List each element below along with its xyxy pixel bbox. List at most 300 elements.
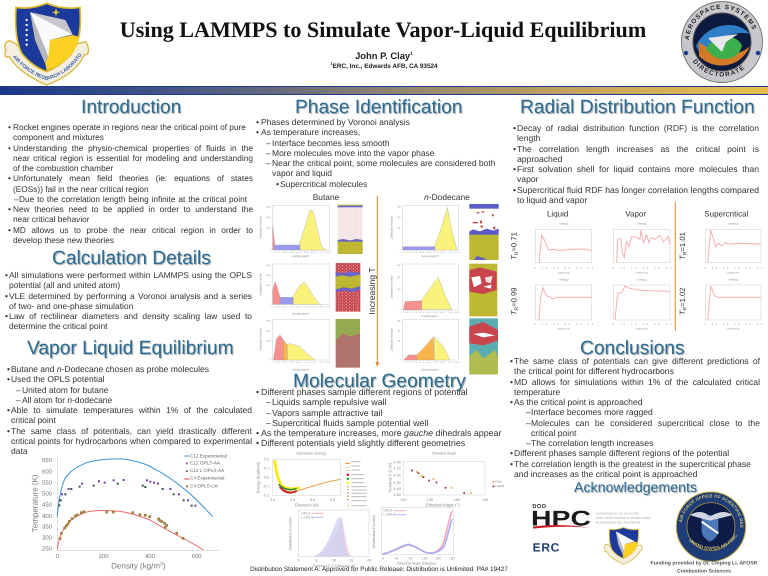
text: conclusions: and increases as the critical point is approached [514,469,697,479]
series: C12 OPLS-AA [59,479,196,507]
text: calculation details: Law of rectilinear diameters and density scaling law used to [9,311,252,321]
heading: Conclusions: Conclusions [580,338,685,359]
logo: ERC: ERC [533,541,560,554]
axis titles: ) [163,561,165,570]
axis labels [259,216,439,371]
text: conclusions: As the critical point is approached [514,397,642,407]
small plot captions: COM(Arg) [559,223,569,225]
text: calculation details: of two- and one-phase simulation [9,301,133,311]
acknowledgement logos [531,492,758,574]
text: calculation details: determine the critical point [9,321,108,331]
axis titles: Density (kg/m [111,561,160,570]
heading: Introduction: Introduction [81,97,181,118]
column label: Butane: Butane [313,192,340,202]
text: introduction: develop these new theories [13,235,114,245]
tick labels [42,457,52,552]
logo: small AFRL shield [605,527,642,564]
reduced temperature labels [510,232,688,315]
phase identification charts: 1000 [266,340,271,342]
chart: dihedral angle: Dihedral Angle (°) [426,502,460,507]
text: conclusions: MD allows for simulations within 1% of the calculated critical [514,376,760,386]
chart: dihedral angle: Liquid [495,484,504,488]
text: introduction: of the combustion chamber [13,163,113,173]
chart: dihedral angle: 130 [427,498,433,502]
text: introduction: – [14,194,19,204]
text: conclusions: The same class of potentials can give different predictions of [514,356,760,366]
tick labels: 0 100 200 300 400 500 600 700 800 [402,361,460,364]
axis labels: Distribution Function [390,216,393,239]
tick labels: 300 [42,534,52,541]
text: vapor liquid equilibrium: – [16,384,21,394]
phase identification charts: 300 [397,340,401,342]
axis labels: Density (kg/m³) [422,368,439,371]
heading: Radial Distribution Function: Radial Distribution Function [520,97,755,118]
text: radial distribution function: • [513,184,516,194]
text: introduction: • [8,173,11,183]
text: introduction: component and mixtures [13,132,104,142]
text: phase identification: • [256,127,259,137]
text: molecular geometry: Supercritical fluids sample potential well [272,418,428,428]
tick labels [271,251,460,364]
tick labels: 0 100 200 300 400 500 600 700 800 [271,251,331,254]
chart: dihedral angle: 4.10 [394,466,401,470]
text: conclusions: • [510,376,513,386]
text: phase identification: • [276,178,279,188]
text: molecular geometry: Different phases sample different regions of potential [261,387,468,397]
tick labels: 0 100 200 300 400 500 600 700 800 [271,306,331,308]
chart: interaction energy: -0.1 [263,485,269,489]
text: vapor liquid equilibrium: – [16,395,21,405]
chart: dihedral angle [388,452,504,507]
text: introduction: MD allows us to probe the near critical region in order to [13,224,253,234]
series: C12 experimental [57,459,213,517]
chart: dihedral angle: 4.30 [394,481,401,485]
simulation snapshot: dodecane mid T [469,264,497,316]
text: conclusions: • [510,448,513,458]
small plot captions: Distance (A) [636,272,648,274]
text: conclusions: – [526,418,531,428]
chart: dihedral angle distribution: 180 [449,557,455,560]
text: phase identification: • [256,117,259,127]
text: vapor liquid equilibrium: data [11,446,28,456]
histogram: dodecane mid T [403,277,452,310]
text: introduction: Due to the correlation length being infinite at the critical point [19,194,247,204]
tick labels: 500 [42,490,52,497]
column labels: Liquid [547,210,568,219]
header gradient bar [0,86,768,95]
chart: dihedral angle distribution: 120 [422,557,428,560]
text: phase identification: Supercritical molecules [280,178,367,188]
text: introduction: Rocket engines operate in regions near the critical point of pure [13,122,246,132]
text: introduction: near critical region is essential for modeling and understanding [13,153,253,163]
phase identification charts: 0 [270,248,271,251]
chart: interaction energy: Energy (kcal/mol) [256,462,260,493]
chart: interaction energy: 4.0 [290,498,295,502]
small plot captions: Distance (A) [727,328,739,330]
text: conclusions: Interface becomes more ragged [531,407,653,417]
chart: interaction energy: 0.2 [264,458,269,462]
chart: C-C distance distribution [288,510,371,568]
series: C4 experimental [57,511,203,550]
text: funding [651,560,757,574]
chart: C-C distance distribution: 20 [367,559,371,563]
text: department of defense HPC modernization: MODERNIZATION PROGRAM [596,521,640,524]
histogram: dodecane low T [403,207,457,250]
histogram: butane mid T [273,282,322,304]
text: conclusions: The correlation length is the greatest in the supercritical phase [514,458,751,468]
text: vapor liquid equilibrium: • [7,364,10,374]
text: calculation details: • [5,311,8,321]
column labels: Vapor [625,210,646,219]
logo: DoD HPC: HPC [531,506,591,530]
tick labels: 550 [42,479,52,486]
tick labels: 650 [42,457,52,463]
chart: dihedral angle distribution: 160 [436,557,441,560]
simulation snapshot: butane low T [338,205,363,254]
text: radial distribution function: vapor [517,174,538,184]
chart: dihedral angle: 150 [482,498,488,502]
text: radial distribution function [513,123,759,205]
text: molecular geometry: • [256,438,259,448]
logo: Aerospace Systems Directorate seal: AEROSPACE SYSTEMS [684,4,756,40]
text: vapor liquid equilibrium: • [7,405,10,415]
logo: Aerospace Systems Directorate seal [681,1,763,83]
chart: C-C distance distribution: 10 [332,559,336,563]
chart: interaction energy: 5.0 [310,498,315,502]
chart: C-C distance distribution: Terminal C-C Distance (A) [313,564,355,568]
text: introduction: Understanding the physio-chemical properties of fluids in the [13,142,253,152]
simulation snapshot: butane high T [336,319,360,368]
chart: dihedral angle: 4.40 [394,487,401,491]
chart: temperature vs density: 600 [192,553,202,559]
phase identification charts: 2000 [266,274,271,277]
tick labels: 0 100 200 300 400 500 600 700 800 [402,311,460,314]
chart: dihedral angle distribution [372,507,455,565]
text: radial distribution function: • [513,123,516,133]
text: calculation details: VLE determined by performing a Voronoi analysis and a series [9,290,252,300]
simulation snapshot: butane mid T [336,263,360,312]
legend: C12 L-OPLS-AA [190,468,224,473]
column labels [547,210,748,219]
axis labels: Density (kg/m³) [292,312,309,315]
text: vapor liquid equilibrium: critical point [11,415,56,425]
text: introduction [8,122,253,245]
chart: dihedral angle distribution: L-OPLS [383,513,395,517]
phase identification charts: 600 [397,330,401,332]
text: conclusions [510,356,760,479]
text: conclusions: temperature [514,387,560,397]
phase identification charts: 300 [397,288,401,291]
phase identification charts: 3000 [266,320,271,322]
text: introduction: • [8,142,11,152]
text: calculation details [5,270,252,331]
text: conclusions: • [510,356,513,366]
reduced temperature labels: T [678,255,687,260]
chart: interaction energy: 0.1 [264,467,269,471]
phase identification charts: 0 [400,358,401,361]
text: radial distribution function: length [517,133,540,143]
small plot captions: COM(Arg) [637,223,647,225]
legend [184,453,227,488]
chart: dihedral angle: 140 [454,498,460,502]
phase identification charts [259,195,499,374]
text: vapor liquid equilibrium: Butane and n-Dodecane chosen as probe molecules [11,364,209,374]
logo: AFOSR seal [676,492,746,562]
text: radial distribution function: Decay of radial distribution function (RDF) is the correlation [517,123,759,133]
text: vapor liquid equilibrium: • [7,374,10,384]
text: phase identification: – [266,138,271,148]
text: introduction: • [8,224,11,234]
chart: dihedral angle distribution: 0 [382,557,384,560]
column labels: Supercritical [704,210,748,219]
RDF plots [510,202,762,331]
phase identification charts: 600 [397,276,401,279]
chart: temperature vs density: Temperature (K) [30,474,39,532]
text: vapor liquid equilibrium: Used the OPLS potential [11,374,105,384]
chart: interaction energy: Interaction Energy [296,452,326,456]
chart: temperature vs density: 0 [56,553,59,559]
text: phase identification: – [266,158,271,168]
chart: C-C distance distribution: L-OPLS [301,516,313,519]
small plot captions [558,223,739,330]
text: calculation details: All simulations were performed within LAMMPS using the OPLS [9,270,252,280]
text: introduction: New theories need to be applied in order to understand the [13,204,253,214]
tick labels: 0 10 20 30 40 50 [612,267,671,269]
text: calculation details: potential (all and united atom) [9,280,120,290]
reduced temperature labels: R [682,307,688,310]
logo: AFOSR seal: UNITED STATES AIR FORCE [690,534,737,550]
text: department of defense HPC modernization [596,512,651,524]
tick labels: 0 100 200 300 400 500 600 700 800 [271,361,331,364]
text: radial distribution function: to liquid and vapor [517,195,587,205]
chart: temperature vs density: 200 [99,553,109,559]
legend: C12 Experimental [190,453,227,458]
text: radial distribution function: approached [517,154,562,164]
text: vapor liquid equilibrium: critical points for hydrocarbons when compared to experimental [11,436,252,446]
chart: dihedral angle: Gas [495,480,501,483]
tick labels [534,267,762,326]
legend: C4 OPLS-UA [190,483,218,488]
text: funding: Funding provided by Dr. Chiping Li, AFOSR [651,560,757,566]
chart: C-C distance distribution: 5 [315,559,317,563]
chart: temperature vs density [30,453,227,570]
molecular geometry charts [256,452,504,568]
text: conclusions: – [526,438,531,448]
footer: distribution statement: Distribution Statement A: Approved for Public Release; Distribution is Unlimited. PA# 19427 [250,566,508,573]
text: vapor liquid equilibrium [7,364,252,456]
chart: dihedral angle: Terminal C-C (A) [388,463,393,493]
text: vapor liquid equilibrium: Able to simulate temperatures within 1% of the calculated [11,405,252,415]
tick labels: 0 100 200 300 400 500 600 700 800 [402,251,460,254]
chart: interaction energy: 6.0 [330,498,335,502]
chart: dihedral angle distribution: Dihedral Angle (Degree) [397,561,436,565]
text: radial distribution function: • [513,164,516,174]
axis titles: 3 [160,561,163,567]
text: molecular geometry: – [266,418,271,428]
phase identification charts: 900 [397,264,401,267]
simulation snapshot: dodecane high T [469,318,498,374]
heading: Phase Identification: Phase Identification [295,97,462,118]
text: phase identification: Phases determined by Voronoi analysis [261,117,410,127]
text: molecular geometry: – [266,397,271,407]
text: phase identification: vapor and liquid [272,168,332,178]
phase identification charts: 600 [397,216,401,219]
chart: interaction energy: Distance (A) [295,502,319,507]
affiliation: 1ERC, Inc., Edwards AFB, CA 93524 [330,61,438,70]
reduced temperature labels: T [510,310,518,315]
text: calculation details: • [5,270,8,280]
heading: Molecular Geometry: Molecular Geometry [293,371,466,392]
chart: C-C distance distribution: 0 [298,559,300,563]
axis labels: Distribution Function [259,273,262,296]
axis labels: Density (kg/m³) [292,255,309,258]
phase identification charts: 2000 [266,330,271,332]
chart: C-C distance distribution: Distribution Function [288,517,292,550]
phase identification charts: 1000 [266,284,271,287]
logo: AFOSR seal: AIR FORCE OFFICE OF SCIENTIFIC RESEARCH [679,494,744,528]
logo: DoD HPC: DOD [532,503,546,509]
phase identification charts: 900 [397,320,401,322]
legend: C12 OPLS-AA [190,460,220,465]
arrow: increasing temperature [375,195,379,367]
text: phase identification: More molecules move into the vapor phase [272,148,435,158]
text: molecular geometry: – [266,408,271,418]
tick labels: 0 10 20 30 40 50 [704,267,762,269]
phase identification charts: 3000 [266,264,271,267]
chart: C-C distance distribution: 15 [349,559,353,563]
chart: dihedral angle distribution: 40 [395,557,399,560]
chart: dihedral angle: 4.20 [394,474,401,478]
chart: dihedral angle: 4.00 [394,461,401,465]
text: molecular geometry: Vapors sample attractive tail [272,408,382,418]
text: phase identification: – [266,148,271,158]
legend: C4 Experimental [190,475,224,481]
chart: dihedral angle distribution: 80 [409,557,413,560]
tick labels: 0 10 20 30 40 50 [612,323,671,326]
phase identification charts: 0 [400,308,401,311]
reduced temperature labels: R [514,307,519,310]
tick labels: 0 10 20 30 40 50 [534,323,593,326]
axis labels: Distribution Function [390,328,393,351]
reduced temperature labels: R [682,251,688,255]
text: introduction: near critical behavior [13,214,90,224]
phase identification charts: 900 [397,206,401,208]
text: phase identification: As temperature increases, [261,127,360,137]
text: phase identification: Near the critical point, some molecules are considered both [272,158,495,168]
phase identification charts: 2000 [266,216,271,219]
text: radial distribution function: The correlation length increases as the critical point is [517,144,759,154]
phase identification charts: 300 [397,227,401,229]
chart: dihedral angle: 120 [400,498,406,502]
text: vapor liquid equilibrium: United atom for butane [22,384,108,394]
axis labels: Distribution Function [259,216,262,239]
small plot captions: Distance (A) [727,272,739,274]
chart: dihedral angle: Dihedral Angle [432,452,456,456]
plot frames [536,229,761,320]
text: molecular geometry: As the temperature increases, more gauche dihedrals appear [261,428,501,438]
legend: interaction energy [345,462,367,506]
text: vapor liquid equilibrium: All atom for n-dodecane [22,395,112,405]
axis labels: Distribution Function [390,276,393,298]
tick labels: 0 10 20 30 40 50 [534,267,593,269]
axis labels: Density (kg/m³) [292,368,309,371]
logo: Aerospace Systems Directorate seal: DIRECTORATE [692,58,744,76]
reduced temperature labels: T [510,255,518,260]
text: radial distribution function: First solvation shell for liquid contains more molecules than [517,164,759,174]
chart: dihedral angle distribution: Distribution Function [372,515,376,548]
text: radial distribution function: • [513,144,516,154]
chart: interaction energy [256,452,341,507]
text: introduction: Unfortunately mean field theories (ie: equations of states [13,173,253,183]
phase identification charts: 0 [270,303,271,305]
histogram: butane high T [273,335,315,360]
text: molecular geometry [256,387,502,448]
author: John P. Clay1 [355,50,413,61]
heading: Calculation Details: Calculation Details [52,248,211,269]
tick labels: 450 [42,501,52,508]
histogram: dodecane high T [404,337,450,360]
axis labels: Distribution Function [259,328,262,351]
simulation snapshot: dodecane low T [469,204,499,260]
divider arrow: orange [674,202,677,331]
small plot captions: Distance (A) [636,328,648,330]
reduced temperature labels: R [514,251,519,255]
text: molecular geometry: • [256,428,259,438]
heading: Acknowledgements: Acknowledgements [574,480,697,496]
text: funding: Combustion Sciences [677,568,731,574]
chart: dihedral angle distribution: OPLS [383,509,392,513]
tick labels: 600 [42,468,52,475]
chart: interaction energy: 3.0 [270,498,275,502]
text: conclusions: the critical point for different hydrocarbons [514,366,674,376]
phase identification charts: 1000 [266,227,271,229]
phase identification charts: 0 [270,358,271,361]
small plot captions: COM(Arg) [728,223,738,225]
logo: DoD HPC [531,503,591,530]
text: vapor liquid equilibrium: • [7,426,10,436]
chart: temperature vs density: 400 [145,553,155,559]
title: Using LAMMPS to Simulate Vapor-Liquid Equilibrium [120,17,646,42]
heading: Vapor Liquid Equilibrium: Vapor Liquid Equilibrium [27,338,234,359]
axis labels: Density (kg/m³) [422,255,439,258]
chart: dihedral angle: 4.50 [394,493,401,497]
chart: C-C distance distribution: OPLS [301,512,310,515]
text: conclusions: Molecules can be considered supercritical close to the [531,418,760,428]
small plot captions: COM(Arg) [728,279,738,281]
text: conclusions: critical point [531,428,576,438]
label: Increasing T: Increasing T [367,267,377,315]
tick labels: 0 10 20 30 40 50 [704,323,762,326]
text: department of defense HPC modernization: DEPARTMENT OF DEFENSE [596,512,639,515]
text: conclusions: – [526,407,531,417]
series: C4 OPLS-UA [59,510,184,540]
phase identification charts: 3000 [266,206,271,208]
tick labels: 250 [42,545,52,552]
histogram: butane low T [273,210,327,250]
reduced temperature labels: T [678,310,687,315]
tick labels: 350 [42,523,52,530]
axis labels: Density (kg/m³) [422,315,439,318]
text: introduction: • [8,122,11,132]
tick labels: 400 [42,513,52,519]
text: conclusions: The correlation length increases [531,438,653,448]
column label: n-Dodecane: n-Dodecane [424,192,470,202]
text: radial distribution function: Supercritical fluid RDF has longer correlation lengths compared [517,184,759,194]
text: introduction: (EOSs)) fail in the near critical region [13,184,149,194]
reduced temperature labels: =1.02 [678,287,687,307]
text: conclusions: Different phases sample different regions of the potential [514,448,729,458]
text: department of defense HPC modernization: HIGH PERFORMANCE COMPUTING [596,516,651,520]
